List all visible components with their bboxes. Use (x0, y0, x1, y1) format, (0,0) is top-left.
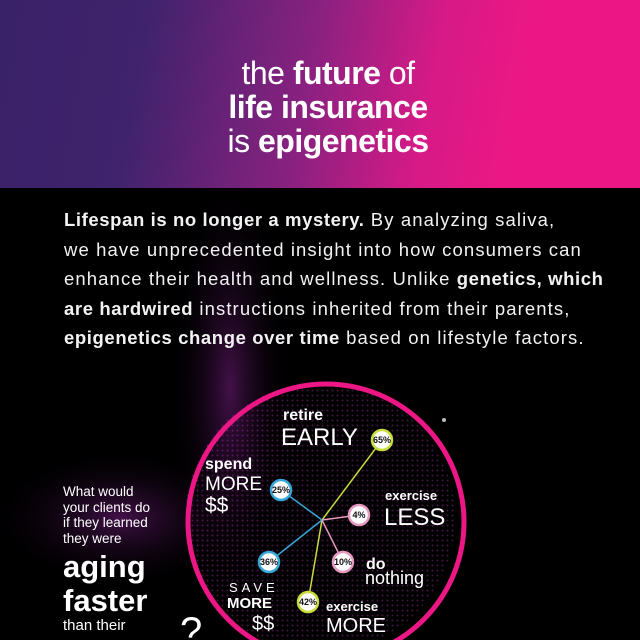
badges: 25% (272, 485, 290, 495)
ring (188, 384, 464, 640)
intro paragraph: Lifespan is no longer a mystery. By analyzing saliva, (64, 209, 555, 230)
title (227, 55, 429, 159)
labels: spend (205, 456, 252, 473)
labels: EARLY (281, 424, 358, 451)
intro paragraph: are hardwired instructions inherited from their parents, (64, 298, 570, 318)
question text: they were (63, 530, 122, 546)
title: is epigenetics (227, 123, 429, 159)
question text: faster (63, 583, 147, 618)
question text: than their (63, 617, 126, 634)
badges: 4% (352, 510, 366, 520)
badges (259, 430, 392, 612)
labels: $$ (205, 494, 229, 517)
badges: 42% (299, 597, 317, 607)
labels: $$ (252, 613, 274, 635)
labels: exercise (385, 488, 437, 503)
question text: if they learned (63, 515, 148, 530)
labels: exercise (326, 599, 378, 614)
intro paragraph: we have unprecedented insight into how consumers can (64, 238, 582, 260)
title: life insurance (228, 89, 428, 125)
labels (205, 407, 445, 637)
intro paragraph: enhance their health and wellness. Unlike genetics, which (64, 268, 604, 289)
question text: aging (63, 549, 146, 584)
labels: nothing (365, 568, 424, 588)
title: the future of (241, 55, 415, 91)
small dot (442, 418, 446, 422)
badges: 36% (260, 557, 278, 567)
labels: SAVE (229, 580, 279, 595)
labels: retire (283, 407, 323, 424)
labels: MORE (227, 595, 272, 612)
question text (63, 484, 150, 634)
question text: your clients do (63, 500, 150, 514)
labels: do (366, 556, 386, 573)
intro paragraph: epigenetics change over time based on lifestyle factors. (64, 327, 585, 348)
badges: 65% (373, 435, 391, 445)
header banner (0, 0, 640, 188)
question text: What would (63, 484, 134, 499)
badges: 10% (334, 557, 352, 567)
labels: MORE (205, 474, 262, 495)
labels: LESS (384, 504, 445, 531)
connector lines (269, 440, 382, 602)
decorative glow (34, 241, 454, 640)
labels: MORE (326, 615, 386, 637)
intro paragraph (64, 209, 604, 348)
